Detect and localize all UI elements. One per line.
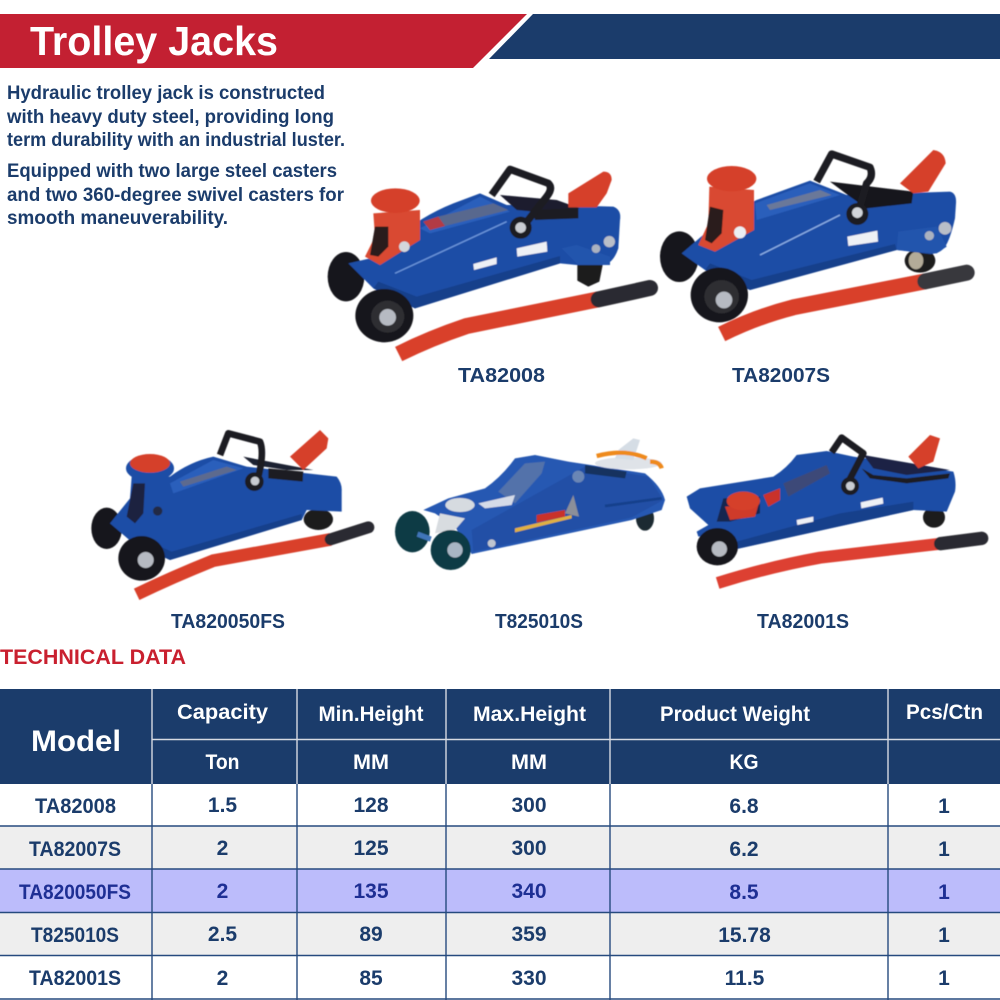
row: TA820050FS (highlighted) (19, 880, 950, 904)
table header: MM (353, 751, 389, 774)
row: T825010S: 89 (359, 923, 383, 946)
product: jack TA82008 (328, 169, 650, 354)
row: TA820050FS (highlighted): 2 (217, 880, 228, 903)
description text: and two 360-degree swivel casters for (7, 185, 345, 206)
row: T825010S: 359 (511, 923, 547, 946)
row: TA82008 (35, 794, 950, 818)
table header: Max.Height (473, 703, 586, 726)
row: TA82001S: 2 (217, 967, 228, 990)
row: TA82008: 6.8 (729, 795, 759, 818)
product: jack TA820050FS (91, 430, 368, 594)
model labels (171, 365, 849, 633)
description text (6, 83, 345, 229)
description text: term durability with an industrial luster. (7, 130, 345, 151)
product: jack TA82001S (687, 435, 982, 583)
row: TA82007S: 2 (217, 837, 228, 860)
model labels: TA82008 (458, 365, 545, 387)
description text: with heavy duty steel, providing long (6, 107, 334, 128)
table header: KG (730, 751, 758, 774)
row: TA82001S: 85 (359, 967, 383, 990)
description text: smooth maneuverability. (7, 208, 228, 229)
table header: Ton (206, 751, 240, 774)
title: Trolley Jacks (30, 18, 278, 64)
technical data table (0, 689, 1000, 1000)
row: TA82001S: 11.5 (725, 967, 765, 990)
row: TA82007S: 1 (938, 838, 950, 861)
row: T825010S (31, 923, 950, 947)
row: TA82007S: 125 (353, 837, 389, 860)
row: TA82007S: 6.2 (729, 838, 759, 861)
row: TA82001S: TA82001S (29, 967, 121, 990)
row: T825010S: 2.5 (208, 923, 237, 946)
row: TA82007S: TA82007S (29, 838, 121, 861)
row: T825010S: T825010S (31, 924, 119, 947)
row: TA82007S (29, 837, 950, 861)
product: jack TA82007S (660, 150, 967, 334)
description text: Hydraulic trolley jack is constructed (7, 83, 325, 104)
model labels: TA82001S (757, 611, 849, 633)
row: TA82001S (29, 967, 950, 990)
title banner (0, 14, 1000, 68)
table header: Product Weight (660, 703, 810, 726)
row: TA82008: 128 (353, 794, 389, 817)
row: TA82007S: 300 (511, 837, 547, 860)
row: TA820050FS (highlighted): 340 (511, 880, 547, 903)
row: TA820050FS (highlighted): 8.5 (729, 881, 759, 904)
model labels: T825010S (495, 611, 583, 633)
table header: Pcs/Ctn (906, 701, 983, 724)
table header: MM (511, 751, 547, 774)
model labels: TA820050FS (171, 611, 285, 633)
row: TA82008: 1.5 (208, 794, 237, 817)
row: TA820050FS (highlighted): TA820050FS (19, 881, 131, 904)
row: T825010S: 1 (938, 924, 950, 947)
row: TA820050FS (highlighted): 1 (938, 881, 950, 904)
table header: Model (31, 725, 121, 758)
row: T825010S: 15.78 (718, 924, 771, 947)
table header: Min.Height (318, 703, 424, 726)
row: TA820050FS (highlighted): 135 (353, 880, 389, 903)
product: jack T825010S (395, 438, 665, 570)
row: TA82008: TA82008 (35, 795, 116, 818)
row: TA82001S: 1 (938, 967, 950, 990)
row: TA82001S: 330 (511, 967, 547, 990)
row backgrounds and grid (0, 784, 1000, 1000)
description text: Equipped with two large steel casters (7, 161, 337, 182)
table header: Capacity (177, 701, 268, 724)
section heading: technical data: TECHNICAL DATA (0, 646, 186, 669)
model labels: TA82007S (732, 365, 830, 387)
table header (0, 689, 1000, 784)
row: TA82008: 1 (938, 795, 950, 818)
row: TA82008: 300 (511, 794, 547, 817)
